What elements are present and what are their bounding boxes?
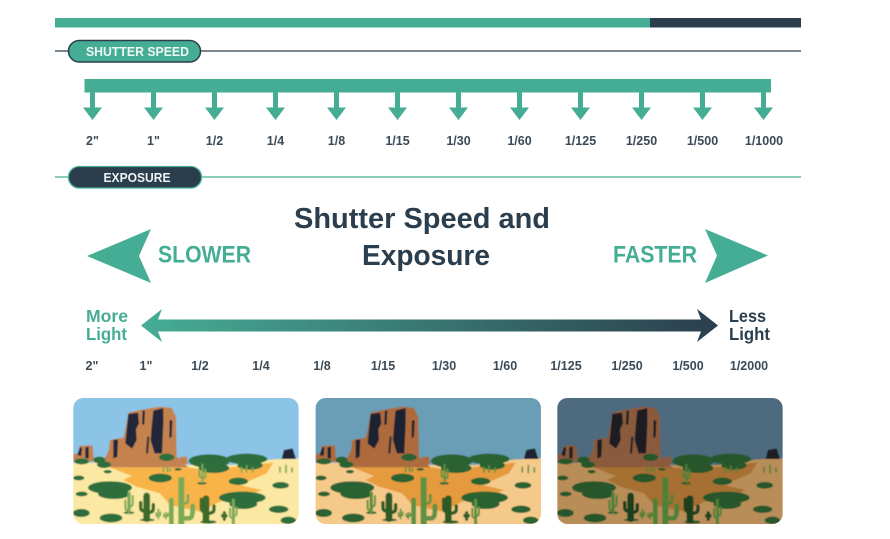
- exposure labels: 1": [140, 359, 153, 373]
- shutter speed labels: 1": [147, 134, 160, 148]
- less light label: Less: [729, 306, 766, 326]
- more light label: Light: [86, 324, 127, 344]
- shutter speed labels: 1/8: [328, 134, 345, 148]
- slower label: SLOWER: [158, 242, 251, 268]
- shutter speed labels: 1/250: [626, 134, 657, 148]
- exposure labels: 1/500: [672, 359, 704, 373]
- faster label: FASTER: [613, 242, 697, 268]
- photo: bright desert scene: [70, 395, 302, 527]
- exposure labels: 1/250: [611, 359, 643, 373]
- slower arrow: [87, 229, 151, 283]
- title: Shutter Speed and: [294, 203, 550, 235]
- shutter speed labels: 1/2: [206, 134, 223, 148]
- section header: exposure: EXPOSURE: [104, 171, 170, 185]
- exposure labels: 1/2: [191, 359, 209, 373]
- photo: dark desert scene: [554, 395, 786, 527]
- shutter speed labels: 1/60: [507, 134, 532, 148]
- shutter speed scale with arrows: [83, 79, 773, 120]
- more light label: More: [86, 306, 128, 326]
- section header: exposure: [55, 166, 801, 188]
- exposure labels: 1/125: [550, 359, 582, 373]
- exposure labels: 1/60: [493, 359, 517, 373]
- section header: shutter speed: [55, 40, 801, 62]
- exposure labels: 1/15: [371, 359, 395, 373]
- faster arrow: [705, 229, 768, 283]
- title: [294, 203, 550, 272]
- shutter speed labels: 2": [86, 134, 99, 148]
- photo: medium desert scene: [312, 395, 544, 527]
- exposure labels: 2": [86, 359, 99, 373]
- shutter speed labels: 1/125: [565, 134, 596, 148]
- exposure labels: [86, 359, 768, 373]
- shutter speed labels: 1/4: [267, 134, 284, 148]
- section header: shutter speed: SHUTTER SPEED: [86, 45, 189, 59]
- top progress bar: [55, 18, 801, 28]
- title: Exposure: [362, 240, 490, 272]
- exposure labels: 1/8: [313, 359, 331, 373]
- more light label: [86, 306, 128, 344]
- double-headed light arrow: [141, 309, 718, 342]
- shutter speed labels: 1/30: [446, 134, 471, 148]
- less light label: [729, 306, 770, 344]
- exposure labels: 1/4: [252, 359, 270, 373]
- exposure labels: 1/30: [432, 359, 456, 373]
- shutter speed labels: [86, 134, 783, 148]
- shutter speed labels: 1/500: [687, 134, 718, 148]
- shutter speed labels: 1/1000: [745, 134, 783, 148]
- less light label: Light: [729, 324, 770, 344]
- exposure labels: 1/2000: [730, 359, 768, 373]
- shutter speed labels: 1/15: [385, 134, 410, 148]
